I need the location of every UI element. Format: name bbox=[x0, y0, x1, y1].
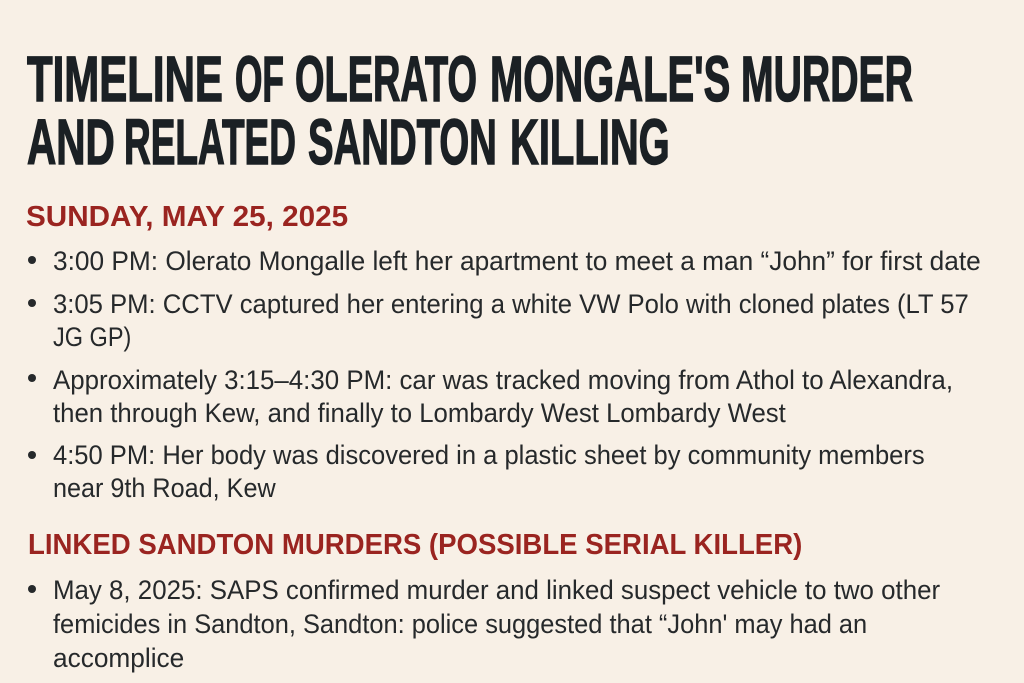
title: OLERATO bbox=[295, 43, 477, 115]
bullet: 4:50 PM: 4:50 PM: Her body was discovered in a plastic sheet by community members bbox=[53, 440, 925, 470]
title: RELATED bbox=[124, 106, 296, 178]
title: MURDER bbox=[741, 43, 913, 115]
heading: Sunday, May 25, 2025: SUNDAY, MAY 25, 2025 bbox=[26, 201, 348, 233]
title bbox=[26, 43, 913, 178]
bullet: May 8, 2025: accomplice bbox=[53, 643, 184, 673]
title: TIMELINE bbox=[27, 43, 223, 115]
title: OF bbox=[235, 43, 284, 115]
bullet: 3:05 PM bbox=[28, 289, 969, 352]
bullet: May 8, 2025 bbox=[28, 575, 940, 673]
title: SANDTON bbox=[308, 106, 497, 178]
bullet: approximately 3:15-4:30 PM: Approximately 3:15–4:30 PM: car was tracked moving from Athol to Alexandra, bbox=[53, 365, 953, 395]
title: MONGALE'S bbox=[490, 43, 730, 115]
bullet: 3:00 PM: 3:00 PM: Olerato Mongalle left her apartment to meet a man “John” for first date bbox=[53, 246, 981, 276]
bullet: approximately 3:15-4:30 PM: then through Kew, and finally to Lombardy West Lombardy West bbox=[53, 398, 786, 428]
bullet: 4:50 PM bbox=[28, 440, 925, 503]
title: KILLING bbox=[510, 106, 670, 178]
bullet: 4:50 PM: near 9th Road, Kew bbox=[53, 473, 276, 503]
bullet: May 8, 2025: femicides in Sandton, Sandton: police suggested that “John' may had an bbox=[53, 609, 867, 639]
bullet: 3:05 PM: JG GP) bbox=[53, 322, 131, 352]
bullet: May 8, 2025: May 8, 2025: SAPS confirmed murder and linked suspect vehicle to two other bbox=[53, 575, 940, 605]
title: AND bbox=[27, 106, 115, 178]
heading: Linked Sandton murders: LINKED SANDTON MURDERS (POSSIBLE SERIAL KILLER) bbox=[28, 529, 802, 561]
bullet: approximately 3:15-4:30 PM bbox=[28, 365, 953, 428]
bullet: 3:05 PM: 3:05 PM: CCTV captured her entering a white VW Polo with cloned plates (LT 57 bbox=[53, 289, 969, 319]
